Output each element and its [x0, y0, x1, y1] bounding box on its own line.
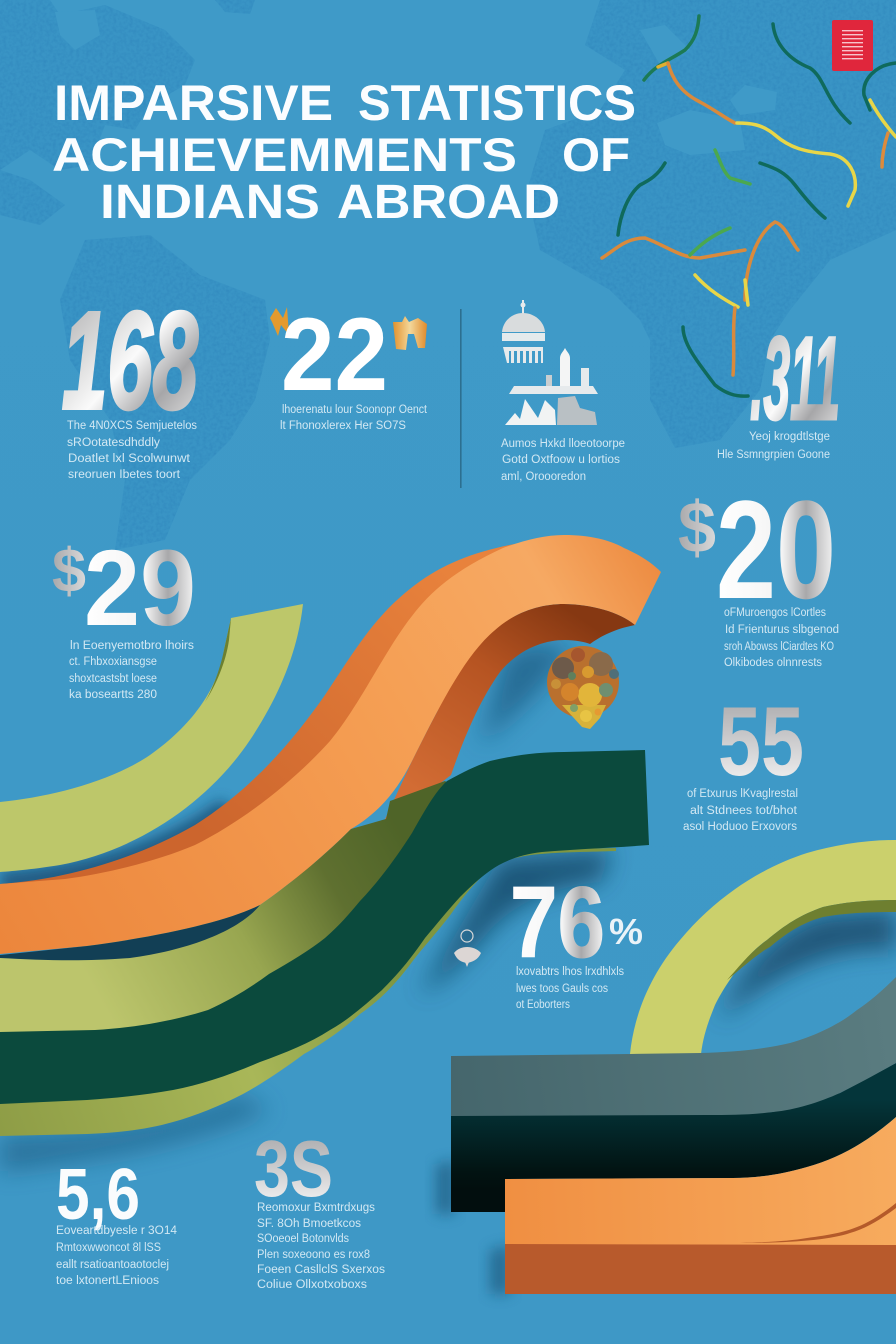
- caption: landmark: aml, Oroooredon: [501, 471, 586, 483]
- stat: $29: 29: [84, 527, 196, 648]
- stat: 5,6: Eoveartdbyesle r 3O14: [56, 1225, 178, 1237]
- stat: $20: [678, 471, 839, 669]
- stat: $29: ct. Fhbxoxiansgse: [69, 656, 157, 668]
- stat: 3S: SOoeoel Botonvlds: [257, 1233, 349, 1245]
- ribbon: dark teal block: [451, 1063, 896, 1212]
- stat: 3S: [254, 1124, 385, 1291]
- stat: 168: 168: [62, 284, 198, 438]
- stat: $20: Olkibodes olnnrests: [724, 657, 822, 669]
- stat: 55: alt Stdnees tot/bhot: [690, 805, 798, 817]
- stat: 3S: Coliue Ollxotxoboxs: [257, 1279, 367, 1291]
- caption: landmark: [501, 438, 625, 483]
- stat: 22: [270, 297, 428, 432]
- stat: $29: $: [52, 537, 86, 606]
- stat: 22: lhoerenatu lour Soonopr Oenct: [282, 404, 428, 416]
- stat: 3S: SF. 8Oh Bmoetkcos: [257, 1218, 361, 1230]
- stat: $29: ln Eoenyemotbro lhoirs: [70, 640, 194, 652]
- title: OF: [562, 128, 630, 181]
- stat: .311: Hle Ssmngrpien Goone: [717, 449, 830, 461]
- ribbon: light orange: [0, 535, 661, 954]
- stat: 55: 55: [718, 686, 804, 796]
- stat: 5,6: [56, 1155, 178, 1287]
- stat: $20: 20: [716, 471, 836, 628]
- stat: 168: sROotatesdhddly: [67, 437, 160, 449]
- ribbon: left olive arc: [0, 604, 303, 872]
- title: ACHIEVEMMENTS: [52, 128, 517, 181]
- title: [52, 75, 636, 229]
- stat: 76%: 76: [510, 867, 605, 979]
- stat: 168: [62, 284, 198, 481]
- map route lines: [602, 16, 896, 396]
- stat: 5,6: toe lxtonertLEnioos: [56, 1275, 159, 1287]
- icon: landmark buildings: [502, 300, 598, 425]
- icon: red logo square: [832, 20, 873, 71]
- stat: 22: lt Fhonoxlerex Her SO7S: [280, 420, 406, 432]
- ribbon: dark orange back: [0, 543, 560, 900]
- icon: left flag ornament: [270, 307, 289, 336]
- ribbon: lower olive: [0, 848, 616, 1136]
- stat: 5,6: 5,6: [56, 1155, 140, 1235]
- ribbon: right olive arc: [630, 840, 896, 1054]
- stat: .311: Yeoj krogdtlstge: [749, 431, 830, 443]
- ribbon: middle olive: [0, 781, 470, 1040]
- ribbon: dark green: [0, 750, 649, 1104]
- stat: 55: [683, 686, 804, 833]
- stat: 3S: 3S: [254, 1124, 333, 1213]
- stat: 76%: %: [609, 911, 643, 952]
- stat: 76%: [510, 867, 643, 1011]
- title: ABROAD: [337, 176, 560, 229]
- stat: 168: Doatlet lxl Scolwunwt: [68, 453, 191, 465]
- icon: right monument ornament: [393, 316, 427, 350]
- ribbon shadows: [0, 644, 896, 1294]
- ribbon: orange block: [505, 1117, 896, 1245]
- stat: $29: ka boseartts 280: [69, 689, 157, 701]
- stat: 3S: Plen soxeoono es rox8: [257, 1249, 370, 1261]
- world map backdrop: [0, 0, 896, 550]
- stat: $20: sroh Abowss lCiardtes KO: [724, 641, 834, 653]
- stat: $20: Id Frienturus slbgenod: [725, 624, 839, 636]
- stat: 55: of Etxurus lKvaglrestal: [687, 788, 798, 800]
- stat: 5,6: Rmtoxwwoncot 8l lSS: [56, 1242, 161, 1254]
- stat: 168: sreoruen Ibetes toort: [68, 469, 181, 481]
- title: STATISTICS: [358, 75, 636, 131]
- icon: colorful globe tree: [547, 646, 619, 729]
- stat: 168: The 4N0XCS Semjuetelos: [67, 420, 197, 432]
- ribbon: grey teal band: [451, 977, 896, 1116]
- stat: 76%: ot Eoborters: [516, 999, 570, 1011]
- stat: .311: [717, 313, 840, 461]
- title: IMPARSIVE: [54, 75, 333, 131]
- ribbon: lower rust block: [505, 1244, 896, 1294]
- stat: 76%: lxovabtrs lhos lrxdhlxls: [516, 966, 624, 978]
- title: INDIANS: [100, 176, 320, 229]
- stat: $20: $: [678, 488, 716, 568]
- stat: 5,6: eallt rsatioantoaotoclej: [56, 1259, 169, 1271]
- stat: $29: [52, 527, 196, 701]
- caption: landmark: Aumos Hxkd lloeotoorpe: [501, 438, 625, 450]
- stat: $29: shoxtcastsbt loese: [69, 673, 157, 685]
- stat: 22: 22: [281, 297, 388, 413]
- stat: 76%: lwes toos Gauls cos: [516, 983, 608, 995]
- icon: pendant: [454, 930, 481, 967]
- stat: 3S: Reomoxur Bxmtrdxugs: [257, 1202, 375, 1214]
- map light seas: [55, 10, 777, 155]
- stat: $20: oFMuroengos lCortles: [724, 607, 826, 619]
- stat: 3S: Foeen CasllclS Sxerxos: [257, 1264, 385, 1276]
- ribbon: rust underside: [380, 604, 635, 830]
- stat: 55: asol Hoduoo Erxovors: [683, 821, 797, 833]
- caption: landmark: Gotd Oxtfoow u lortios: [502, 454, 620, 466]
